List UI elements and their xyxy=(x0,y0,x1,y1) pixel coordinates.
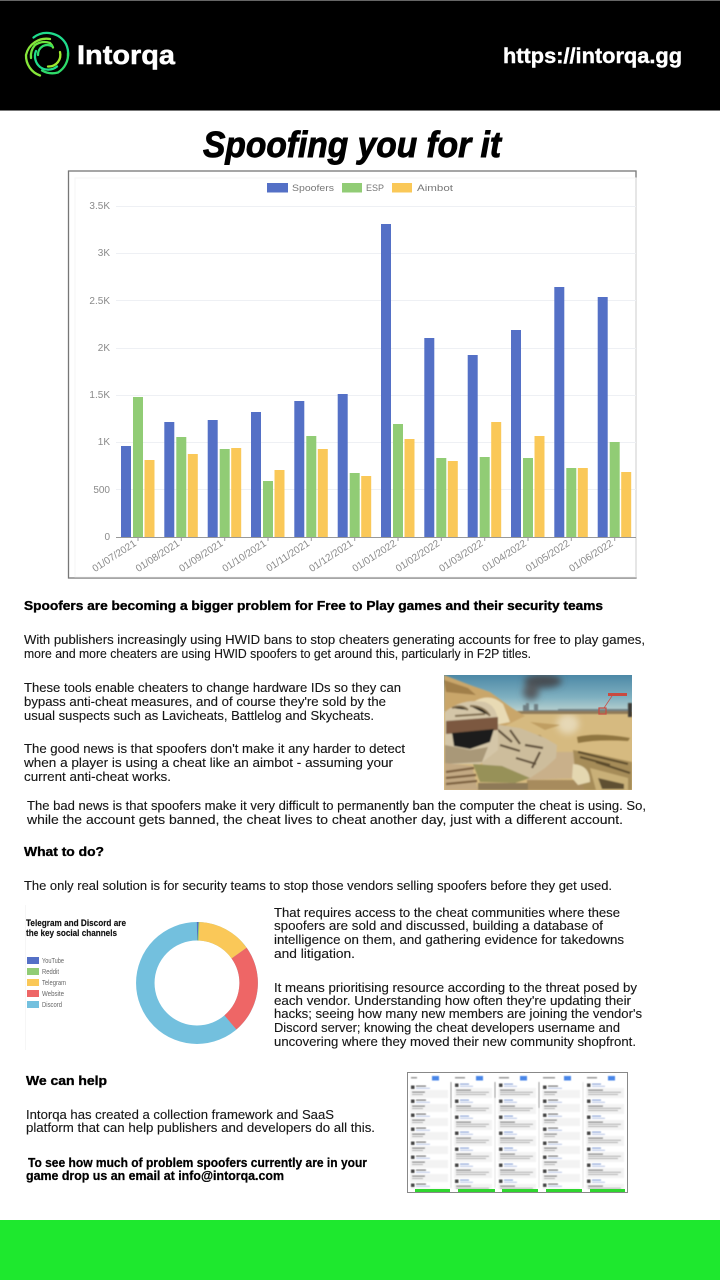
heading: what to do: What to do? xyxy=(24,844,104,859)
text block: Intorqa framework xyxy=(26,1108,375,1135)
text block: HWID bans: more and more cheaters are using HWID spoofers to get around this, particularly in F2P titles. xyxy=(24,647,531,661)
image: Intorqa platform dashboard screenshot xyxy=(408,1072,628,1192)
y axis labels: 0 xyxy=(104,532,110,543)
call to action xyxy=(26,1156,367,1183)
icon: Intorqa swirl logo xyxy=(26,33,68,76)
text block: what spoofers do: usual suspects such as Lavicheats, Battlelog and Skycheats. xyxy=(24,709,374,723)
text block: prioritising resource: It means prioritising resource according to the threat posed by xyxy=(274,981,638,995)
donut heading: Telegram and Discord are xyxy=(26,918,126,928)
logo wordmark: Intorqa xyxy=(77,40,176,70)
text block: what spoofers do xyxy=(24,681,401,723)
text block: good news xyxy=(23,742,406,784)
donut heading xyxy=(26,918,126,938)
x axis date labels: 01/10/2021 xyxy=(221,538,269,575)
donut legend xyxy=(27,956,66,1009)
text block: bad news: while the account gets banned, the cheat lives to cheat another day, just with a different account. xyxy=(26,813,623,827)
heading: we can help: We can help xyxy=(26,1073,107,1088)
y axis labels xyxy=(89,201,110,543)
text block: HWID bans xyxy=(24,633,645,661)
donut legend: Telegram xyxy=(42,978,66,987)
header band xyxy=(0,0,720,111)
title: Spoofing you for it xyxy=(203,124,503,165)
text block: access to cheat communities: intelligence on them, and gathering evidence for takedowns xyxy=(274,933,624,947)
chart legend: ESP xyxy=(366,183,384,194)
call to action: game drop us an email at info@intorqa.com xyxy=(26,1169,284,1183)
text block: access to cheat communities: spoofers are sold and discussed, building a database of xyxy=(274,919,604,933)
y axis labels: 1.5K xyxy=(89,390,110,401)
y axis labels: 3.5K xyxy=(89,201,110,212)
text block: HWID bans: With publishers increasingly using HWID bans to stop cheaters generating accounts for free to play games, xyxy=(24,633,645,647)
text block: access to cheat communities xyxy=(274,906,624,961)
text block: Intorqa framework: Intorqa has created a collection framework and SaaS xyxy=(26,1108,334,1122)
text block: only real solution: The only real solution is for security teams to stop those vendors selling spoofers before they get used. xyxy=(24,879,612,893)
x axis date labels: 01/04/2022 xyxy=(481,538,529,575)
text block: Intorqa framework: platform that can help publishers and developers do all this. xyxy=(26,1121,375,1135)
x axis date labels: 01/07/2021 xyxy=(91,538,139,575)
panel: social channels donut chart xyxy=(26,905,249,1050)
y axis labels: 2.5K xyxy=(89,296,110,307)
y axis labels: 500 xyxy=(93,485,110,496)
donut chart xyxy=(145,931,249,1035)
text block: prioritising resource: Discord server; knowing the cheat developers username and xyxy=(274,1021,620,1035)
y axis labels: 2K xyxy=(98,343,110,354)
heading: spoofers problem: Spoofers are becoming a bigger problem for Free to Play games and their security teams xyxy=(24,598,603,613)
call to action: To see how much of problem spoofers currently are in your xyxy=(28,1156,367,1170)
text block: access to cheat communities: and litigation. xyxy=(274,947,355,961)
x axis date labels: 01/11/2021 xyxy=(265,538,312,574)
chart legend: Aimbot xyxy=(417,183,453,194)
bar chart: spoofers, ESP, aimbot by month xyxy=(68,171,636,578)
website url: https://intorqa.gg xyxy=(503,45,682,68)
x axis date labels: 01/02/2022 xyxy=(394,538,442,575)
text block: prioritising resource: each vendor. Understanding how often they're updating their xyxy=(274,994,631,1008)
text block: good news: current anti-cheat works. xyxy=(24,770,171,784)
donut legend: YouTube xyxy=(42,956,64,965)
image: soldier aiming in desert game screenshot xyxy=(444,674,632,790)
x axis date labels: 01/06/2022 xyxy=(567,538,616,575)
donut heading: the key social channels xyxy=(26,928,117,938)
donut legend: Website xyxy=(42,989,64,998)
footer band xyxy=(0,1220,720,1280)
donut legend: Discord xyxy=(42,1000,62,1009)
chart legend: Spoofers xyxy=(292,183,334,194)
y axis labels: 3K xyxy=(98,248,110,259)
text block: access to cheat communities: That requires access to the cheat communities where these xyxy=(274,906,620,920)
text block: prioritising resource: uncovering where they moved their new community shopfront. xyxy=(274,1035,636,1049)
chart legend xyxy=(267,183,453,194)
x axis date labels: 01/08/2021 xyxy=(134,538,182,575)
x axis date labels xyxy=(91,538,616,575)
aimbot bars xyxy=(144,422,631,537)
x axis date labels: 01/12/2021 xyxy=(307,538,356,575)
x axis date labels: 01/09/2021 xyxy=(177,538,226,575)
text block: good news: when a player is using a cheat like an aimbot - assuming your xyxy=(23,756,393,770)
donut legend: Reddit xyxy=(42,967,60,976)
spoofers bars xyxy=(121,224,608,537)
text block: prioritising resource: hacks; seeing how many new members are joining the vendor's xyxy=(274,1007,642,1021)
x axis date labels: 01/05/2022 xyxy=(524,538,572,575)
x axis date labels: 01/03/2022 xyxy=(437,538,486,575)
text block: what spoofers do: These tools enable cheaters to change hardware IDs so they can xyxy=(24,681,401,695)
text block: good news: The good news is that spoofers don't make it any harder to detect xyxy=(24,742,406,756)
ESP bars xyxy=(133,397,620,537)
text block: what spoofers do: bypass anti-cheat measures, and of course they're sold by the xyxy=(24,695,386,709)
y axis labels: 1K xyxy=(98,437,110,448)
x axis date labels: 01/01/2022 xyxy=(351,538,399,575)
text block: prioritising resource xyxy=(274,981,642,1049)
text block: bad news xyxy=(26,799,646,827)
text block: bad news: The bad news is that spoofers make it very difficult to permanently ban the computer the cheat is using. So, xyxy=(27,799,646,813)
